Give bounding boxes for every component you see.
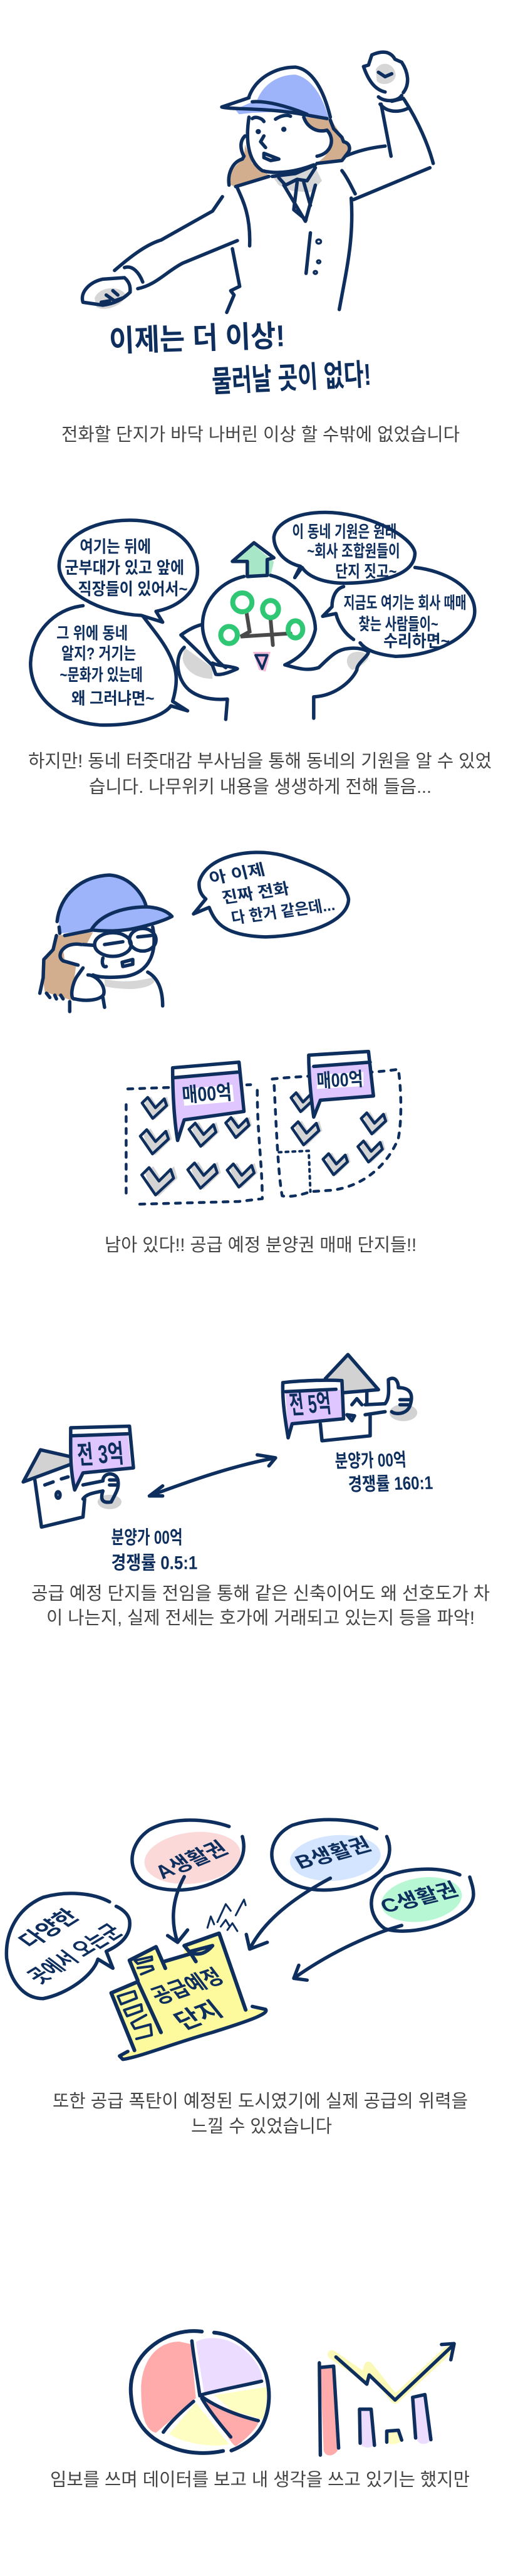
bubble: A zone [132, 1820, 251, 1892]
house label: left: 경쟁률 0.5:1 [111, 1552, 197, 1573]
speech bubble: top right: 단지 짓고~ [335, 563, 396, 581]
character: worried worker [40, 875, 172, 1012]
speech bubble: left: 그 위에 동네 [56, 625, 128, 643]
house: thumbs up [282, 1354, 417, 1441]
speech bubble: right: 찾는 사람들이~ [358, 615, 438, 634]
caption 4: 이 나는지, 실제 전세는 호가에 거래되고 있는지 등을 파악! [46, 1608, 475, 1628]
panel: data charts [131, 2331, 454, 2456]
panel: comparing complexes [23, 1354, 433, 1573]
speech bubble: left [31, 605, 187, 725]
panel: living zones and supply complex [6, 1819, 474, 2060]
double arrow [149, 1455, 276, 1496]
hand-lettered shout: 물러날 곳이 없다! [211, 357, 372, 399]
house label: right: 경쟁률 160:1 [348, 1472, 433, 1495]
speech bubble: top right: ~회사 조합원들이 [307, 543, 400, 561]
price tag: left: 매00억 [181, 1082, 232, 1107]
speech bubble: top right [274, 512, 415, 584]
caption 4 [31, 1583, 490, 1628]
price tag: right [309, 1052, 373, 1117]
speech bubble: worried: 진짜 전화 [220, 879, 291, 907]
caption 5: 느낄 수 있었습니다 [191, 2117, 332, 2137]
hand-lettered shout: 이제는 더 이상! [108, 319, 286, 358]
caption 2: 습니다. 나무위키 내용을 생생하게 전해 들음... [89, 777, 432, 797]
caption 4: 공급 예정 단지들 전임을 통해 같은 신축이어도 왜 선호도가 차 [31, 1583, 490, 1604]
map: left complex with checks [126, 1085, 262, 1204]
map: right complex with checks [272, 1069, 401, 1196]
caption 5 [53, 2091, 468, 2137]
speech bubble: people from everywhere: 다양한 [14, 1905, 85, 1952]
speech bubble: left: 왜 그러냐면~ [71, 690, 154, 708]
speech bubble: left: ~문화가 있는데 [60, 666, 143, 684]
hand-lettered shout [108, 319, 372, 399]
pie chart [131, 2331, 269, 2453]
house label: left [111, 1527, 197, 1573]
bubble: C zone [371, 1869, 474, 1931]
house label: left: 분양가 00억 [111, 1527, 182, 1548]
arrow: B to complex [246, 1878, 330, 1949]
panel: neighborhood elder [31, 512, 475, 725]
house: thumbs up: 전 5억 [287, 1389, 333, 1419]
speech bubble: right [323, 567, 475, 656]
panel: comparing complexes: 전 3억 [76, 1439, 125, 1469]
caption 1: 전화할 단지가 바닥 나버린 이상 할 수밖에 없었습니다 [61, 424, 460, 445]
building: supply complex: 단지 [168, 1997, 229, 2034]
house: thumbs down [23, 1426, 133, 1527]
speech bubble: worried [194, 852, 348, 937]
speech bubble: worried: 다 한거 같은데... [230, 896, 336, 927]
speech bubble: top right: 이 동네 기원은 원래 [292, 523, 396, 542]
price tag: left [173, 1062, 244, 1141]
caption 5: 또한 공급 폭탄이 예정된 도시였기에 실제 공급의 위력을 [53, 2091, 468, 2112]
bar and line chart [319, 2343, 454, 2456]
caption 6: 임보를 쓰며 데이터를 보고 내 생각을 쓰고 있기는 했지만 [50, 2469, 470, 2490]
speech bubble: top left: 군부대가 있고 앞에 [65, 559, 184, 577]
panel: worker pointing [82, 52, 433, 399]
bubble: C zone: C생활권 [377, 1879, 462, 1917]
bubble: B zone: B생활권 [291, 1834, 375, 1873]
speech bubble: right: 수리하면~ [383, 632, 450, 651]
house label: right: 분양가 00억 [334, 1450, 407, 1472]
house label: right [334, 1450, 433, 1495]
panel: worried worker and checked complexes [40, 852, 401, 1204]
bubble: B zone [272, 1819, 390, 1890]
arrow: C to complex [294, 1925, 401, 1980]
illustration: worker with helmet [82, 52, 433, 312]
caption 2 [28, 751, 492, 797]
speech bubble: top left: 직장들이 있어서~ [78, 580, 187, 599]
building: supply complex [111, 1934, 266, 2060]
building: supply complex: 공급예정 [146, 1964, 228, 2008]
character: sprout elder [178, 543, 368, 720]
squiggle marks [207, 1900, 246, 1931]
speech bubble: top left [59, 520, 197, 622]
price tag: right: 매00억 [316, 1069, 364, 1092]
caption 2: 하지만! 동네 터줏대감 부사님을 통해 동네의 기원을 알 수 있었 [28, 751, 492, 772]
bubble: A zone: A생활권 [150, 1838, 233, 1883]
speech bubble: worried: 아 이제 [207, 861, 267, 887]
caption 3: 남아 있다!! 공급 예정 분양권 매매 단지들!! [105, 1235, 417, 1255]
speech bubble: people from everywhere: 곳에서 오는군 [23, 1921, 128, 1988]
arrow: A to complex [168, 1877, 187, 1942]
speech bubble: top left: 여기는 뒤에 [80, 538, 151, 557]
speech bubble: people from everywhere [6, 1893, 130, 1999]
speech bubble: left: 알지? 거기는 [61, 645, 136, 663]
